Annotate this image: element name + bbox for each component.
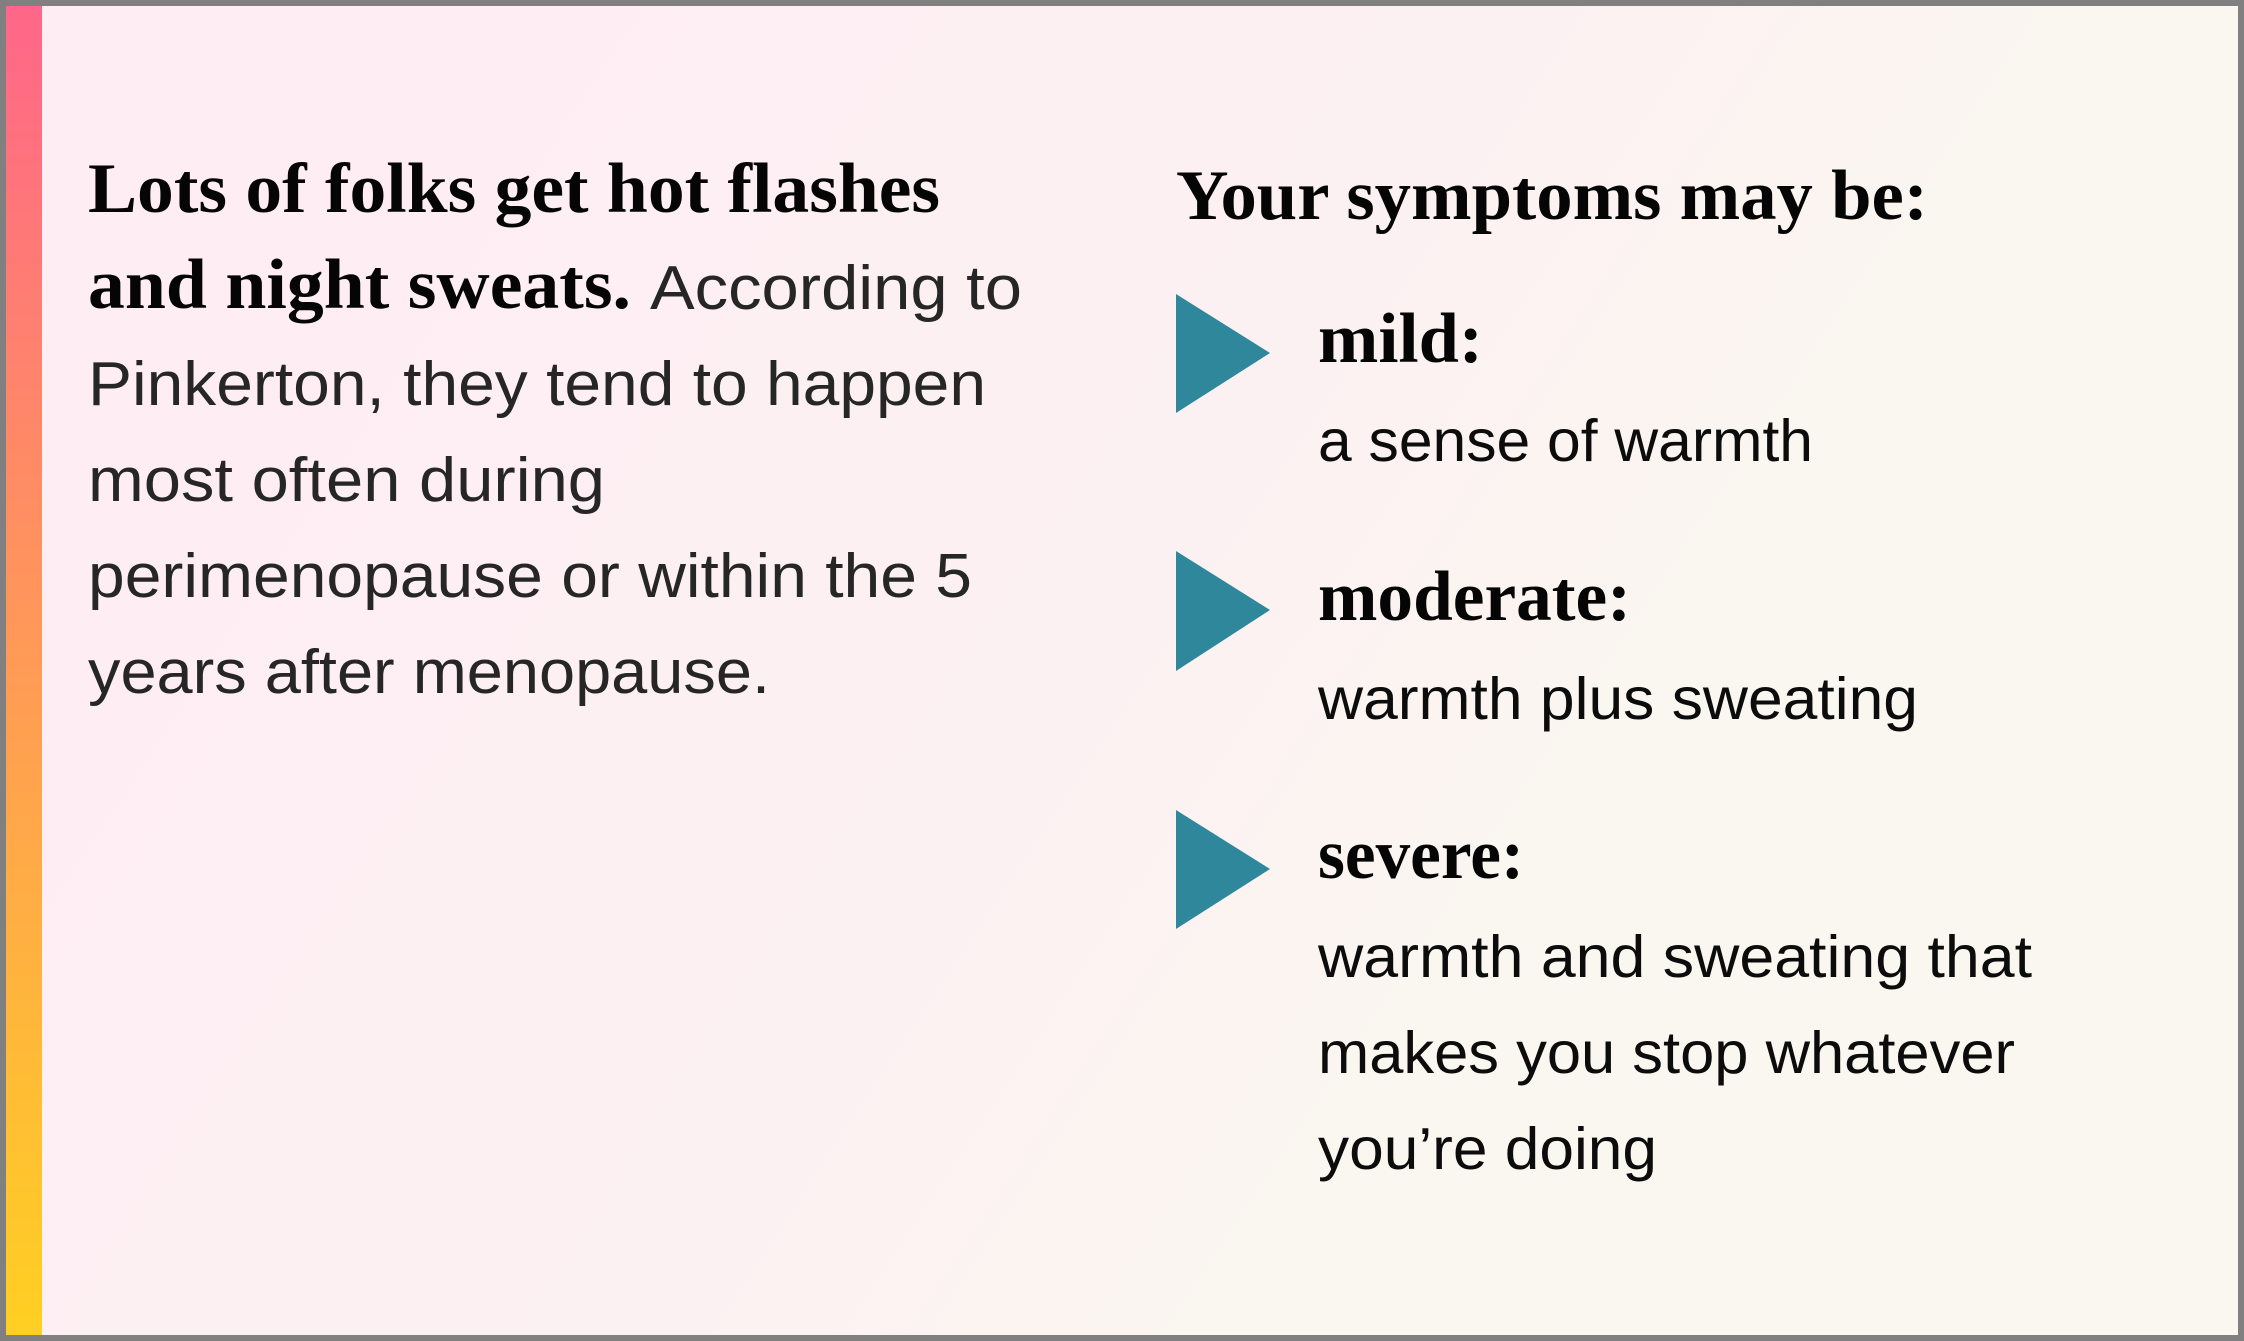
description: severe: warmth and sweating that — [1317, 924, 2032, 990]
gradient accent bar — [6, 6, 42, 1335]
left text block: According to — [650, 254, 1022, 323]
left text block: most often during — [88, 446, 605, 515]
label: moderate: moderate: — [1318, 558, 1631, 636]
description: mild: a sense of warmth — [1318, 408, 1813, 474]
left text block: Pinkerton, they tend to happen — [88, 350, 986, 419]
heading: your symptoms: Your symptoms may be: — [1176, 157, 1928, 235]
left text block: Lots of folks get hot flashes — [88, 150, 940, 228]
left text block: perimenopause or within the 5 — [88, 542, 972, 611]
icon: triangle severe — [1176, 810, 1270, 929]
left text block: years after menopause. — [88, 638, 770, 707]
description: severe: you’re doing — [1318, 1116, 1657, 1182]
description: severe — [1317, 924, 2032, 1182]
icon: triangle moderate — [1176, 551, 1270, 671]
left text block: and night sweats. — [88, 246, 631, 324]
icon: triangle mild — [1176, 294, 1270, 413]
left text block — [88, 150, 1022, 707]
label: mild: mild: — [1318, 300, 1483, 378]
item: mild — [1176, 294, 1813, 474]
label: severe: severe: — [1318, 816, 1524, 894]
description: moderate: warmth plus sweating — [1317, 666, 1918, 732]
item: moderate — [1176, 551, 1918, 732]
description: severe: makes you stop whatever — [1318, 1020, 2015, 1086]
item: severe — [1176, 810, 2032, 1182]
